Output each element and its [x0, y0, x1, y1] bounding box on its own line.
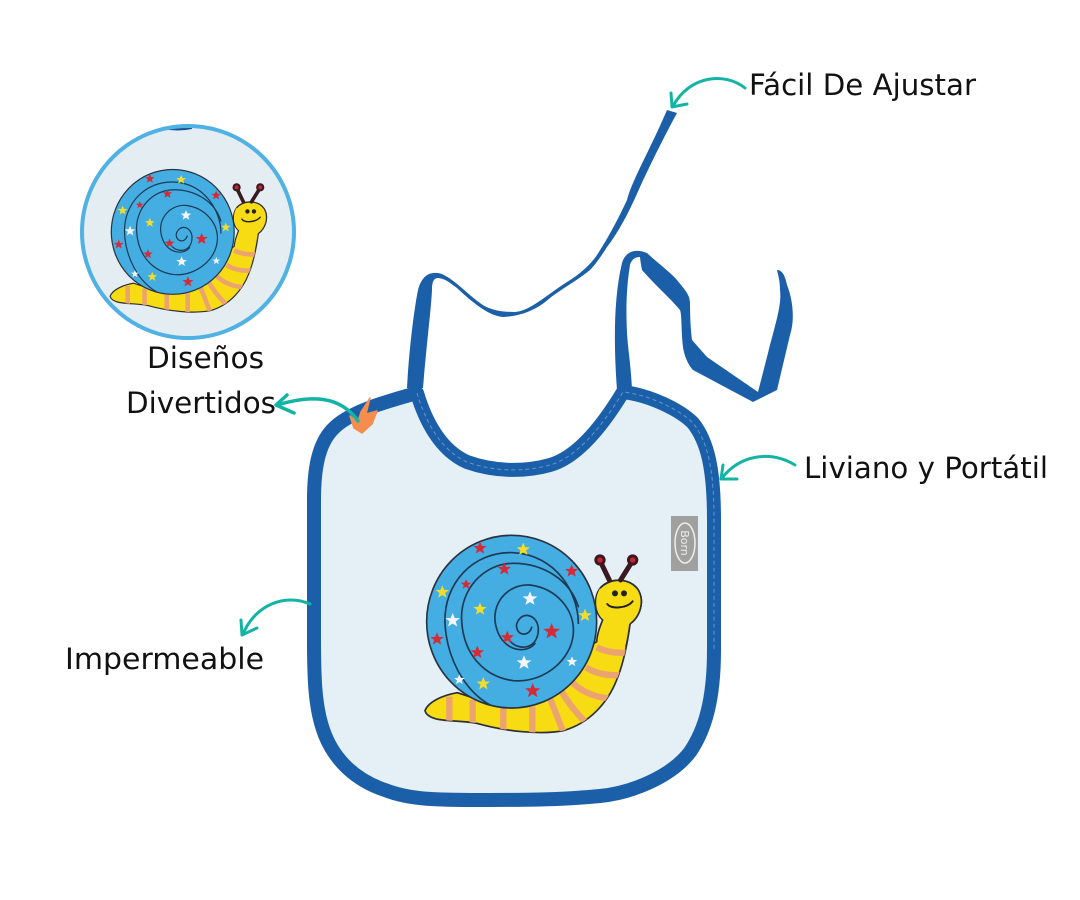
bib body [314, 392, 714, 800]
arrow: liviano [721, 456, 795, 479]
brand tag [671, 516, 698, 571]
left strap [407, 110, 677, 388]
orange mark [350, 398, 377, 433]
label: disenos divertidos: Divertidos [126, 386, 276, 420]
brand tag: Born [678, 530, 691, 556]
circular detail of snail [82, 126, 294, 338]
arrow: divertidos [276, 395, 358, 421]
arrow: impermeable [241, 600, 310, 635]
label: disenos divertidos [126, 341, 276, 420]
label: liviano y portatil: Liviano y Portátil [804, 451, 1048, 485]
label: disenos divertidos: Diseños [147, 341, 264, 375]
label: impermeable: Impermeable [65, 642, 264, 676]
bib straps [407, 110, 793, 402]
main snail illustration [425, 535, 641, 733]
right strap [615, 251, 793, 402]
label: facil de ajustar: Fácil De Ajustar [749, 68, 976, 102]
arrow: ajustar [671, 78, 745, 107]
